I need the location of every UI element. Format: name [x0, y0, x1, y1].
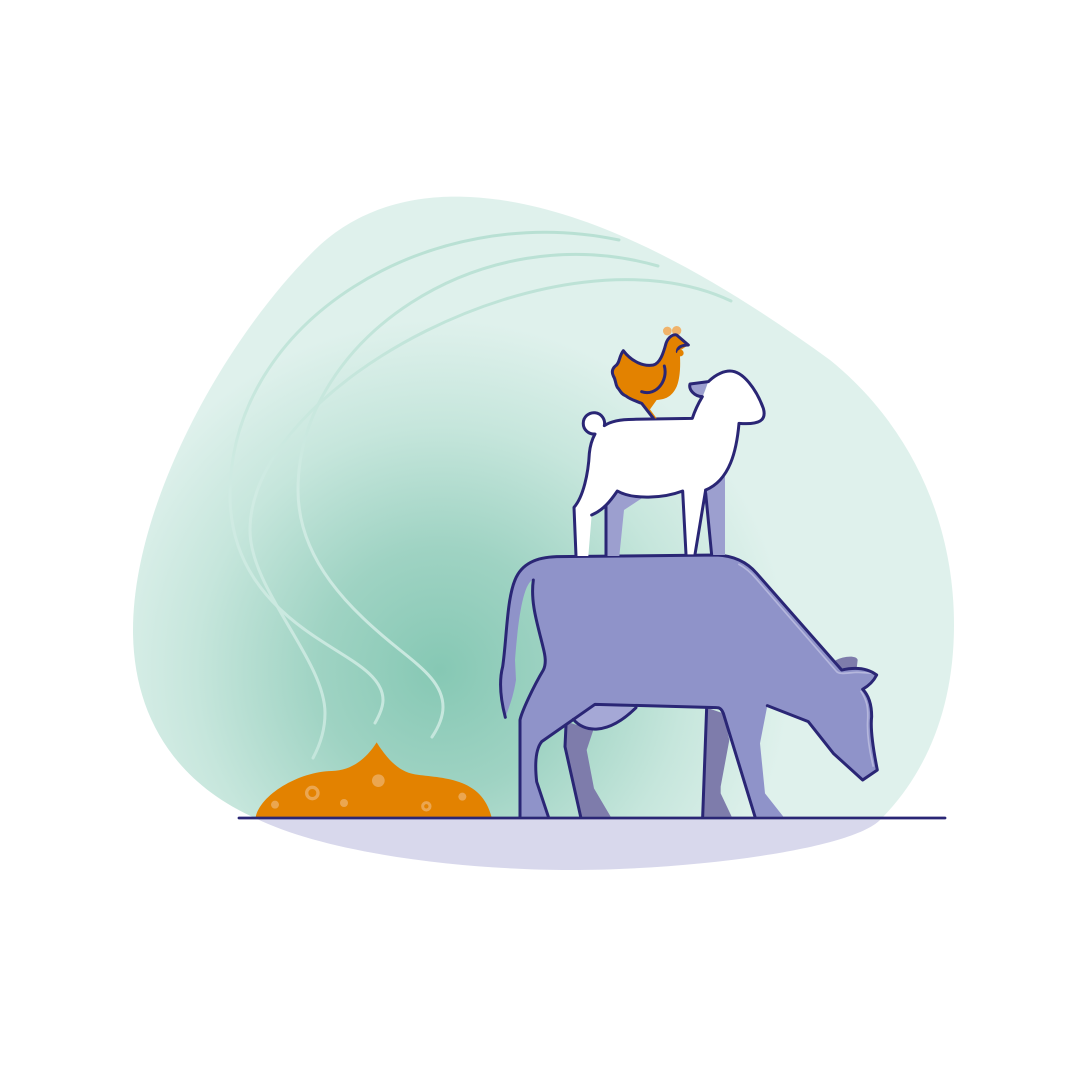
sheep outline [574, 371, 764, 556]
udder [573, 704, 636, 729]
comb [663, 326, 681, 335]
far legs [565, 657, 858, 817]
far legs [606, 382, 725, 556]
chicken outline [612, 335, 688, 418]
cow outline [501, 555, 877, 817]
sheep [574, 371, 764, 556]
wattle [677, 350, 684, 356]
highlights [738, 564, 873, 767]
chicken [612, 326, 688, 418]
odour lines [230, 232, 731, 758]
tail fill [501, 558, 540, 717]
manure pile [256, 742, 492, 817]
sheep body fill [574, 371, 764, 556]
ground shadow [255, 818, 880, 870]
body fill [520, 555, 877, 817]
ground line [239, 817, 945, 819]
background blob [133, 197, 954, 820]
cow [501, 555, 877, 817]
chicken body [613, 335, 688, 418]
